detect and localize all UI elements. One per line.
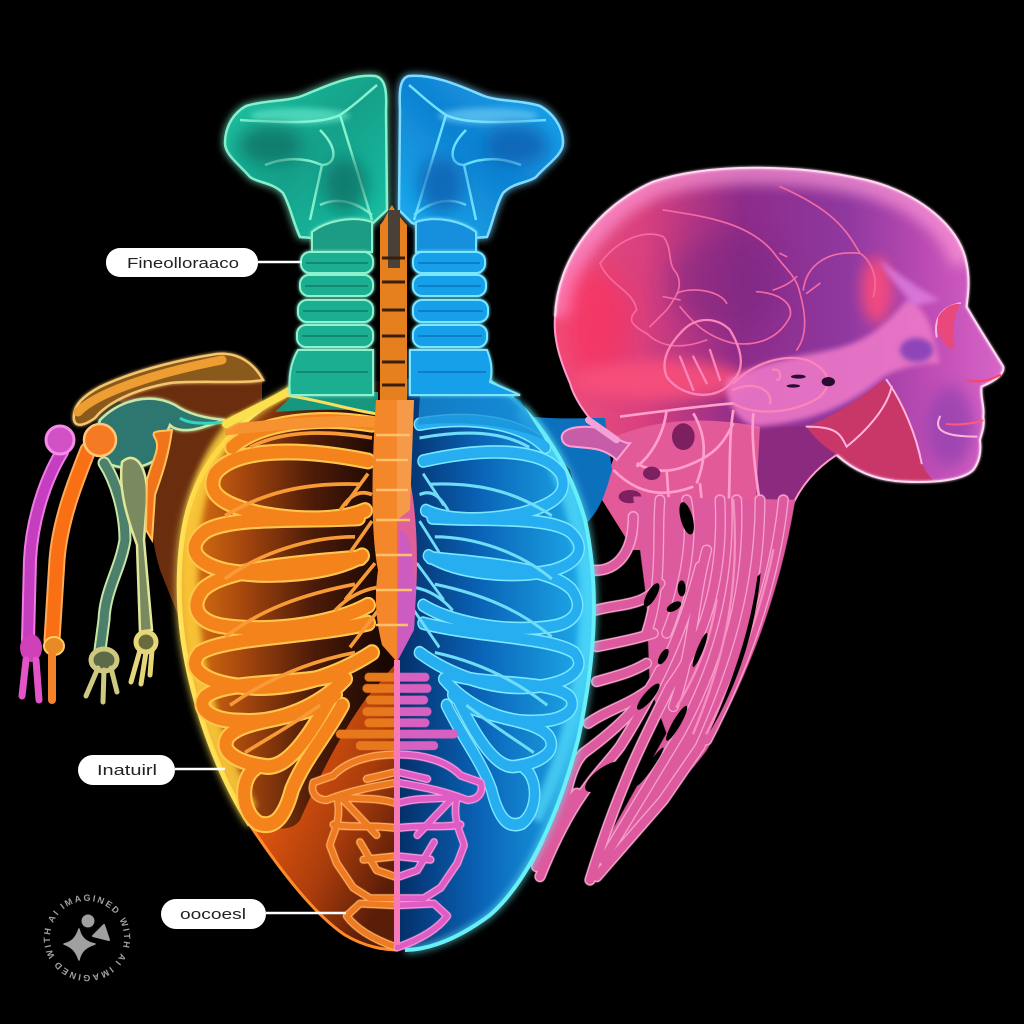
sternum and thoracic spine: [372, 400, 417, 945]
label: lower rib callout: [78, 755, 225, 785]
teal vertebrae: [289, 252, 373, 395]
leader line: [266, 912, 346, 914]
scapula teal: [98, 399, 225, 468]
lattice cells: [619, 423, 695, 503]
magenta hand: [20, 634, 42, 700]
orange neck spine: [380, 205, 407, 400]
pill text: oocoesl: [180, 906, 246, 923]
cheek band: [726, 300, 940, 427]
ear holes: [787, 375, 835, 388]
panel: torso, right blue half: [397, 372, 594, 950]
left torso fill: [179, 380, 397, 950]
icon: triangle: [93, 925, 109, 940]
icon: circle: [82, 914, 94, 928]
jaw panel: [807, 380, 937, 482]
yellow chest streak: [226, 372, 315, 424]
left pelvis: [312, 754, 397, 947]
nostril: [968, 375, 1000, 381]
lower belly: [240, 662, 397, 950]
neck under jaw: [756, 426, 836, 500]
pink shoulder ball: [562, 420, 630, 460]
face features: [807, 303, 977, 463]
cyan glow band: [520, 410, 586, 820]
olive arm: [121, 458, 152, 632]
teal arm: [100, 463, 125, 650]
orange arm second bone: [146, 430, 172, 540]
tendon mass: [587, 497, 795, 877]
blue ribs: [414, 421, 579, 825]
pill text: Fineolloraaco: [127, 255, 239, 272]
orange sternum half: [372, 400, 397, 662]
dark brain centre: [670, 237, 783, 330]
mouth: [947, 421, 983, 424]
nerve strands: pink tendons below the head: [537, 497, 795, 880]
teal bone detail: [240, 85, 377, 220]
sternum segments: [376, 435, 412, 625]
teal showing through at the chest top: [275, 392, 378, 412]
teal skull-shaped bone: [225, 76, 387, 238]
brain veins: [600, 187, 875, 350]
panel: upper teal and blue bones: [225, 76, 563, 400]
blue highlight: [438, 108, 538, 124]
orange arm: [52, 450, 88, 640]
orange ribs: [195, 421, 378, 825]
forehead lilac: [880, 260, 940, 307]
pill: [106, 248, 258, 277]
watermark badge: [44, 894, 170, 982]
black gaps between strands: [581, 501, 761, 798]
pink tangle base: [600, 420, 760, 550]
panel: left arm and shoulder: [20, 354, 263, 702]
pill: [78, 755, 175, 785]
orange shoulder ball: [84, 424, 116, 456]
label: upper neck callout: [106, 248, 302, 277]
panel: pink head and nerve bundle: [537, 168, 1003, 880]
magenta arm: [28, 452, 62, 640]
right chest top: [418, 388, 545, 440]
label: pelvis callout: [161, 899, 346, 929]
blue shoulder stub: [520, 415, 612, 525]
panel: lower spine and pelvis: [312, 677, 482, 947]
leader line: [258, 261, 302, 263]
yellow rim: [179, 385, 300, 825]
blue bone detail: [409, 85, 546, 220]
blue skull-shaped bone: [399, 76, 563, 238]
teal highlight: [250, 108, 350, 124]
pill: [161, 899, 266, 929]
yellow glow band: [190, 420, 250, 810]
pill text: Inatuirl: [97, 762, 157, 779]
brown shoulder web: [100, 371, 262, 620]
clavicle: [74, 354, 263, 425]
blue-side sternum half: [397, 400, 417, 662]
watermark badge: WITH AI IMAGINED WITH AI IMAGINED: [44, 894, 170, 982]
olive hand: [131, 632, 156, 684]
icon: sparkle: [64, 929, 95, 960]
teal hand: [86, 649, 117, 702]
right vertebrae: [397, 677, 454, 746]
chest top band: [225, 422, 375, 430]
blue vertebrae: [410, 252, 520, 395]
blue neck block: [416, 219, 476, 252]
head silhouette: [555, 168, 1003, 550]
central pink line: [394, 660, 400, 945]
skull rim highlight: [555, 168, 967, 317]
neck lattice: [613, 403, 767, 550]
magenta shoulder ring: [46, 426, 74, 454]
red patches: [563, 267, 630, 380]
leader line: [175, 768, 225, 770]
cranial tangle: [665, 320, 828, 412]
right torso fill: [397, 372, 594, 950]
right pelvis: [397, 754, 482, 947]
panel: torso, left orange half: [179, 372, 397, 950]
cyan rim: [405, 372, 594, 950]
eye socket: [938, 304, 960, 350]
head outline: [555, 168, 1003, 482]
orange hand: [44, 637, 64, 700]
left vertebrae: [340, 677, 397, 746]
teal neck block: [312, 219, 372, 252]
